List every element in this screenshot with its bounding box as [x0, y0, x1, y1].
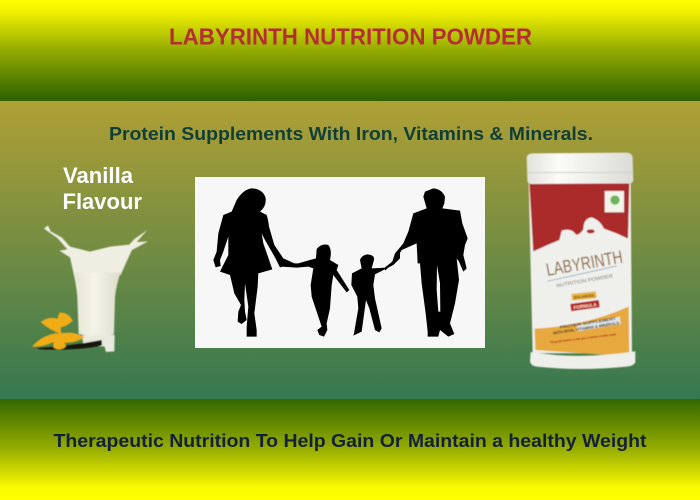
bottom band: [0, 399, 700, 500]
blue claim patch: [577, 317, 621, 331]
subtitle: Protein Supplements With Iron, Vitamins & Minerals.: [109, 124, 593, 144]
flavour label: [62, 163, 142, 214]
title: LABYRINTH NUTRITION POWDER: [169, 24, 532, 50]
formula badge: [570, 300, 600, 311]
splash spot: [587, 229, 595, 233]
vanilla pods: [37, 340, 102, 350]
milk splash: [44, 225, 148, 275]
orange label: [535, 307, 629, 357]
jar lid: [527, 153, 633, 184]
product name: NUTRITION POWDER: [556, 273, 614, 289]
glass base: [82, 335, 115, 352]
blue rule: [547, 266, 617, 281]
family photo panel: [195, 177, 485, 348]
flower: [32, 313, 85, 349]
jar body: [529, 183, 632, 353]
formula badge: FORMULA: [573, 302, 598, 310]
logo mark: [610, 195, 620, 205]
claim text: PROTEIN SUPPLEMENT: [559, 316, 617, 330]
father silhouette: [385, 188, 468, 337]
balanced badge: BALANCED: [574, 294, 595, 300]
boy silhouette: [351, 248, 400, 336]
top band: [0, 0, 700, 101]
jar base: [530, 351, 635, 369]
red label: [529, 183, 629, 251]
therapeutic line: Therapeutic Nutrition to help gain or maintain a healthy weight: [550, 332, 616, 344]
milk glass: [73, 273, 121, 336]
logo tag: [605, 191, 624, 212]
claim text: WITH IRON, VITAMINS & MINERALS: [553, 320, 620, 336]
icon: milk glass with vanilla flower: [32, 225, 148, 352]
flavour label: Vanilla: [63, 163, 134, 188]
bottom tagline: Therapeutic Nutrition To Help Gain Or Maintain a healthy Weight: [54, 431, 646, 451]
girl silhouette: [280, 244, 349, 337]
flavour label: Flavour: [62, 189, 142, 214]
mother silhouette: [213, 188, 294, 337]
product jar: [527, 153, 635, 369]
lid seam: [527, 171, 633, 174]
brand name: LABYRINTH: [545, 247, 624, 280]
middle band: [0, 101, 700, 399]
balanced badge: [571, 291, 597, 301]
panel background: [195, 177, 485, 348]
